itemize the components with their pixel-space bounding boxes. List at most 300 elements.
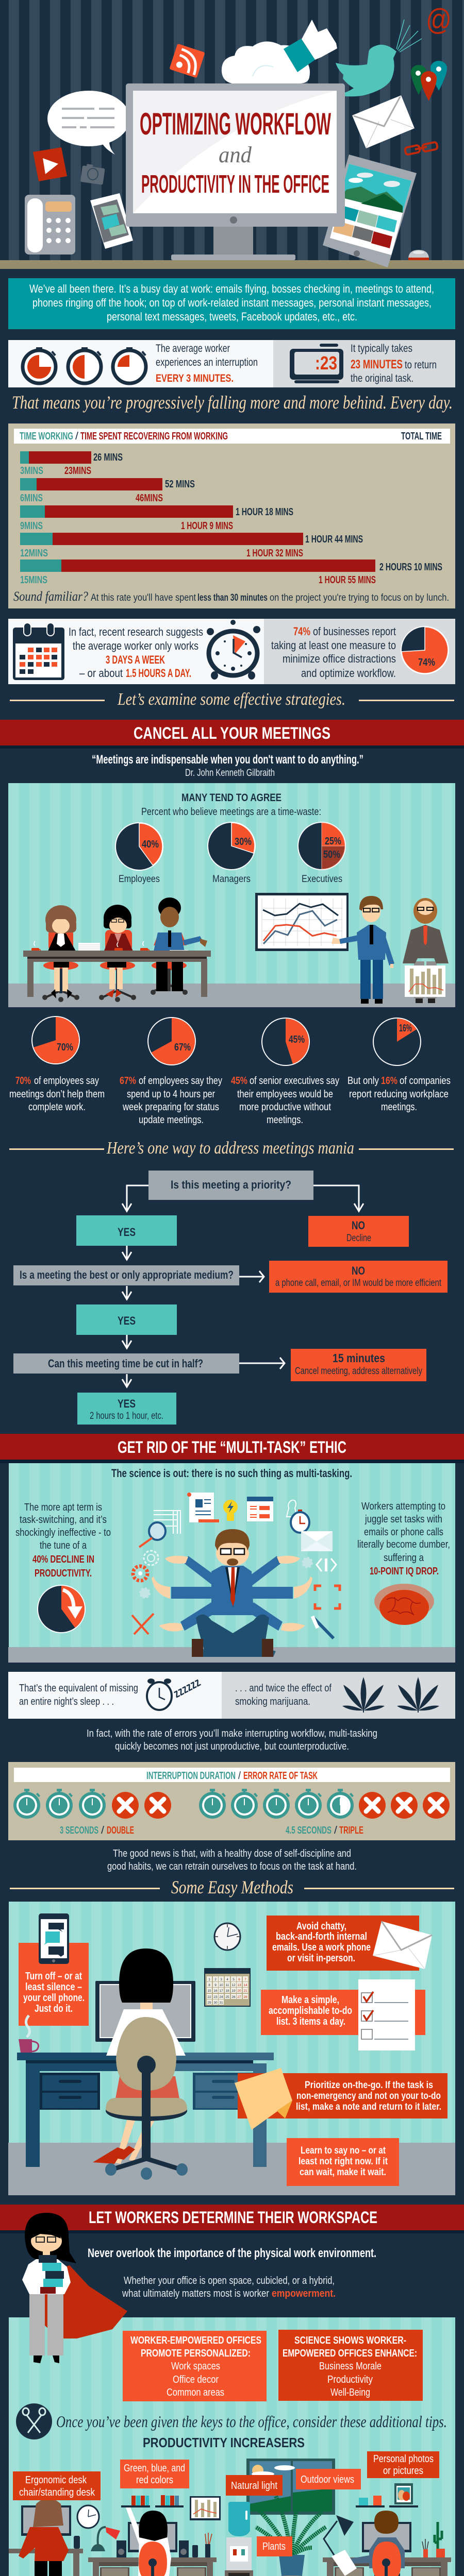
- window: [246, 2459, 335, 2515]
- chart header: /: [75, 431, 78, 442]
- wall calendar: 20: [237, 1989, 241, 1993]
- icon: stopwatch: [291, 1510, 309, 1533]
- icon: desk phone: [25, 195, 75, 255]
- stat: 70 percent: meetings don’t help them: [9, 1089, 105, 1100]
- wall calendar: 26: [231, 1995, 236, 1999]
- right desk with man: [323, 2511, 451, 2576]
- tip card: to-do list: list. 3 items a day.: [276, 2016, 345, 2027]
- stat: 70 percent: complete work.: [28, 1101, 86, 1113]
- icon: light bulb: [223, 1500, 238, 1521]
- text: 3 days a week: – or about: [79, 667, 123, 680]
- label: outdoor views: Outdoor views: [301, 2474, 354, 2485]
- text: every 3 minutes: The average worker: [156, 343, 230, 354]
- wall calendar: 1: [208, 1978, 210, 1981]
- center desk with woman: [88, 2506, 217, 2576]
- text: marijuana: smoking marijuana.: [235, 1696, 310, 1707]
- wall calendar: 25: [225, 1995, 229, 1999]
- stat: 45 percent: their employees would be: [237, 1089, 333, 1100]
- bar row: 1 hour 44 mins: 1 HOUR 44 MINS: [305, 534, 363, 545]
- text: 23 minutes: It typically takes: [351, 343, 412, 354]
- text: sound familiar: At this rate you'll have spent: [91, 592, 196, 603]
- section banner: cancel all your meetings: CANCEL ALL YOUR MEETINGS: [134, 724, 330, 742]
- wall calendar: 30: [213, 2001, 218, 2005]
- wall calendar: 3: [220, 1978, 222, 1981]
- framed chart: [190, 2496, 221, 2520]
- header: INTERRUPTION DURATION: [146, 1770, 236, 1782]
- yes box 2: [76, 1304, 177, 1335]
- icon: envelope: [352, 95, 415, 148]
- text: physical work environment: Whether your office is open space, cubicled, or a hybrid,: [124, 2275, 335, 2286]
- wall calendar: 21: [243, 1989, 247, 1993]
- wall calendar: 16: [213, 1989, 218, 1993]
- wall calendar: [204, 1968, 251, 2007]
- wall calendar: 27: [237, 1995, 241, 1999]
- text: physical work environment: what ultimately matters most is worker: [122, 2288, 269, 2299]
- text: 23 minutes: the original task.: [351, 372, 413, 384]
- pie chart: managers: [208, 822, 255, 885]
- icon: map pins: [411, 61, 447, 101]
- right lamp: [324, 2515, 354, 2565]
- panel: intro text: [8, 278, 455, 329]
- icon: sleeping clock: zzzzzz: [171, 1675, 203, 1701]
- no box: more efficient: [269, 1261, 448, 1293]
- question: medium: [13, 1265, 239, 1285]
- tip card: learn to say no: Learn to say no – or at: [301, 2145, 386, 2156]
- no box: decline: Decline: [346, 1233, 371, 1244]
- wall clock: [214, 1923, 240, 1950]
- wall calendar: 31: [219, 2001, 223, 2005]
- wall calendar: 14: [243, 1984, 247, 1987]
- bar row: 52 mins: [20, 478, 195, 504]
- bar row: 2 hours 10 mins: 15MINS: [20, 574, 47, 586]
- text: missing sleep: [19, 1683, 138, 1707]
- icon group: 4.5 seconds triple: [199, 1789, 450, 1819]
- panel: interruption stats: [8, 340, 455, 387]
- label: 4.5 seconds: 4.5 SECONDS: [286, 1825, 332, 1836]
- icon: calendar: [13, 623, 64, 680]
- pie chart: 74 percent: 74%: [418, 657, 435, 668]
- bar row: 52 mins: 46MINS: [136, 493, 163, 504]
- wall calendar: 5: [233, 1978, 235, 1981]
- bar row: 52 mins: 52 MINS: [165, 479, 195, 490]
- stat: 16 percent: But only: [347, 1075, 379, 1087]
- question: priority: Is this meeting a priority?: [171, 1178, 291, 1191]
- wall calendar: 29: [207, 2001, 211, 2005]
- text: 3 days a week: [69, 625, 203, 680]
- left woman at standing desk: [9, 2498, 83, 2576]
- label: personal photos: [367, 2451, 439, 2478]
- tip card: avoid chatty email: Avoid chatty,: [296, 1921, 346, 1932]
- stat: 45 percent: of senior executives say: [250, 1075, 339, 1087]
- tip card: learn to say no: least not right now. If it: [299, 2156, 388, 2167]
- card: worker-empowered offices: [123, 2331, 267, 2401]
- text: sound familiar: [13, 589, 449, 604]
- text: 3 days a week: the average worker only works: [73, 639, 198, 652]
- wall calendar: 22: [207, 1995, 211, 1999]
- text: IQ drop: Workers attempting to: [361, 1501, 445, 1512]
- pie chart row with statistics: [9, 1016, 451, 1126]
- panel: workspace and productivity increasers: [9, 2317, 455, 2576]
- label: ergonomic desk: Ergonomic desk: [25, 2475, 87, 2486]
- pie chart: employees: 40%: [142, 839, 159, 850]
- stat: 16 percent: 16%: [399, 1023, 412, 1034]
- framed photo: [394, 2483, 413, 2504]
- yes box 3: YES: [118, 1397, 136, 1410]
- panel: easy methods office scene: [8, 1902, 455, 2195]
- question: medium: Is a meeting the best or only appropriate medium?: [20, 1268, 234, 1281]
- label: outdoor views: [296, 2469, 361, 2489]
- bar row: 1 hour 44 mins: [20, 533, 363, 559]
- wall calendar: 10: [219, 1984, 223, 1987]
- yes box 3: [77, 1393, 176, 1425]
- stat: 67 percent: of employees say they: [139, 1075, 222, 1087]
- text: counterproductive: [87, 1728, 377, 1752]
- panel: research stats: [8, 619, 455, 684]
- bar row: 26 mins: 3MINS: [20, 465, 43, 477]
- flowchart arrows: [122, 1185, 363, 1387]
- tip card: learn to say no: [287, 2138, 399, 2186]
- subheading: Percent who believe meetings are a time-waste:: [141, 806, 321, 818]
- wall calendar: 17: [219, 1989, 223, 1993]
- icon: building chart: [154, 1511, 180, 1534]
- text: task switching: The more apt term is: [24, 1502, 102, 1513]
- water cooler: [225, 2502, 253, 2576]
- wall calendar: 8: [208, 1984, 210, 1987]
- label: personal photos: or pictures: [383, 2465, 423, 2477]
- wall calendar: 18: [225, 1989, 229, 1993]
- woman with cape and binders: [22, 2213, 127, 2363]
- bar row: 1 hour 18 mins: 1 HOUR 9 MINS: [181, 520, 233, 532]
- quote: Dr. John Kenneth Gilbraith: [185, 768, 275, 778]
- section banner: multi-task ethic: [0, 1434, 464, 1463]
- label: natural light: [226, 2475, 283, 2496]
- text: counterproductive: In fact, with the rate of errors you’ll make interrupting workflow, multi-tasking: [87, 1728, 377, 1739]
- text: missing sleep: That’s the equivalent of missing: [19, 1683, 138, 1694]
- bar row: 52 mins: 6MINS: [20, 493, 43, 504]
- pie chart: managers: 30%: [235, 836, 252, 848]
- stat: 45 percent: more productive without: [239, 1101, 331, 1113]
- text: IQ drop: juggle set tasks with: [364, 1514, 442, 1525]
- yes box 3: 2 hours to 1 hour, etc.: [90, 1411, 163, 1421]
- script heading: meetings mania: [9, 1139, 454, 1158]
- text: 74 percent of businesses: of businesses report: [313, 625, 396, 638]
- title: and: [219, 142, 252, 167]
- wall calendar: 15: [207, 1989, 211, 1993]
- icon: smartphone: [90, 193, 133, 249]
- text: task switching: 40% DECLINE IN: [32, 1554, 94, 1565]
- bar row: 26 mins: 26 MINS: [93, 452, 123, 463]
- label: ergonomic desk: [13, 2471, 101, 2500]
- icon: desk bell: [408, 250, 429, 260]
- text: good news: [107, 1848, 357, 1872]
- stat: 45 percent: 45%: [231, 1075, 247, 1087]
- monitor: [126, 83, 345, 260]
- person: man in blue suit: [151, 897, 207, 995]
- chart header: [14, 429, 450, 444]
- text: 3 days a week: 1.5 HOURS A DAY.: [126, 667, 191, 680]
- icon: tablet: [323, 155, 417, 267]
- stat: 16 percent: [347, 1018, 451, 1113]
- label: plants: Plants: [262, 2541, 286, 2552]
- question: priority: [148, 1171, 313, 1200]
- text: 74 percent of businesses: [271, 625, 396, 680]
- stat: 45 percent: meetings.: [267, 1114, 303, 1126]
- icon: leaves: [341, 1677, 440, 1713]
- potted plant on table: [256, 2496, 326, 2576]
- wall calendar: 12: [231, 1984, 236, 1987]
- yes box 1: YES: [118, 1226, 136, 1239]
- icon: mail: [301, 1531, 333, 1551]
- panel: many tend to agree with meeting room: [8, 783, 455, 1007]
- person: bearded man holding report: [403, 898, 449, 1003]
- text: 74 percent of businesses: taking at least one measure to: [271, 639, 396, 652]
- panel: time bar chart: [8, 423, 455, 608]
- text: sound familiar: less than 30 minutes: [197, 592, 268, 603]
- panel: interruption duration and error rate: [8, 1762, 455, 1840]
- script heading: meetings mania: Here’s one way to address meetings mania: [106, 1139, 354, 1158]
- person: woman with brown hair: [42, 905, 79, 1002]
- stat: 16 percent: meetings.: [381, 1101, 417, 1113]
- text: 3 days a week: 3 DAYS A WEEK: [106, 653, 165, 666]
- tip card: avoid chatty email: or visit in-person.: [287, 1953, 355, 1964]
- text: task switching: [15, 1502, 111, 1579]
- icon: stopwatches: [23, 347, 146, 383]
- wall calendar: 13: [237, 1984, 241, 1987]
- tip card: avoid chatty email: [267, 1916, 432, 1971]
- quote: [92, 753, 363, 778]
- label: 4.5 seconds: /: [334, 1825, 337, 1836]
- tip card: prioritize on the go: Prioritize on-the-go. If the task is: [305, 2080, 433, 2091]
- box: 15 minutes: 15 minutes: [333, 1351, 385, 1365]
- header: /: [238, 1770, 241, 1782]
- text: marijuana: . . . and twice the effect of: [235, 1683, 332, 1694]
- icon: wrench: [313, 1618, 334, 1638]
- tip card: silence cell phone: least silence –: [25, 1981, 82, 1993]
- stat: 67 percent: week preparing for status: [122, 1101, 219, 1113]
- icon: twitter bird: [335, 20, 422, 96]
- script heading: some easy methods: [10, 1877, 454, 1897]
- coffee cups and paper stacks: [31, 941, 188, 955]
- text: sound familiar: Sound familiar?: [13, 589, 88, 604]
- pie chart: executives: 50%: [323, 849, 340, 860]
- woman from behind: [93, 1948, 188, 2180]
- wall calendar: 7: [244, 1978, 246, 1981]
- icon: chess pawn: [287, 1500, 297, 1517]
- checklist: [358, 1979, 415, 2050]
- bar row: 1 hour 44 mins: 1 HOUR 32 MINS: [246, 548, 303, 559]
- pie chart: 74 percent: [401, 626, 449, 674]
- text: IQ drop: suffering a: [384, 1552, 424, 1564]
- text: every 3 minutes: experiences an interruption: [156, 357, 258, 368]
- tip card: to-do list: [261, 1979, 425, 2050]
- text: task switching: task-switching, and it’s: [20, 1514, 107, 1526]
- card: science shows: Well-Being: [330, 2387, 370, 2398]
- icon: digital clock: :23: [315, 352, 337, 374]
- text: good news: good habits, we can retrain ourselves to focus on the task at hand.: [107, 1861, 357, 1872]
- label: 3 seconds: /: [101, 1825, 104, 1836]
- section banner: multi-task ethic: GET RID OF THE “MULTI-TASK” ETHIC: [118, 1438, 346, 1456]
- icon group: 3 seconds double: [13, 1789, 171, 1819]
- icon: alarm clock: [207, 620, 260, 680]
- stat: 70 percent: of employees say: [34, 1075, 99, 1087]
- desk: [17, 2053, 274, 2167]
- pie chart: executives: [298, 822, 345, 885]
- icon: magnifier: [139, 1522, 165, 1547]
- heading: The science is out: there is no such thing as multi-tasking.: [111, 1467, 352, 1480]
- tip card: avoid chatty email: back-and-forth internal: [276, 1931, 367, 1942]
- chart header: TIME WORKING: [20, 431, 73, 442]
- text: IQ drop: 10-POINT IQ DROP.: [370, 1566, 439, 1577]
- text: physical work environment: [88, 2246, 376, 2299]
- section banner: cancel all your meetings: [0, 720, 464, 749]
- multitasking man: [152, 1529, 312, 1657]
- heading: MANY TEND TO AGREE: [181, 792, 281, 804]
- pie chart: employees: [115, 823, 163, 885]
- bar row: 26 mins: 23MINS: [64, 465, 91, 477]
- stat: 67 percent: 67%: [174, 1042, 191, 1053]
- stat: 45 percent: 45%: [289, 1034, 305, 1045]
- card: worker-empowered offices: Common areas: [167, 2387, 224, 2398]
- label: personal photos: Personal photos: [373, 2453, 434, 2465]
- label: colors: Green, blue, and: [124, 2463, 185, 2474]
- icon: at sign: @: [426, 3, 452, 37]
- text: task switching: PRODUCTIVITY.: [35, 1568, 92, 1579]
- wall calendar: 6: [238, 1978, 240, 1981]
- icon: focus corners: [315, 1586, 340, 1608]
- icon: info code brackets: [317, 1558, 336, 1571]
- text: 23 minutes: to return: [405, 359, 437, 371]
- no box: decline: [308, 1216, 409, 1247]
- bar row: 1 hour 18 mins: [20, 505, 293, 532]
- stat: 70 percent: 70%: [57, 1042, 73, 1053]
- icon: crossed keys: [16, 2403, 52, 2439]
- card: science shows: Productivity: [327, 2374, 373, 2385]
- label: natural light: Natural light: [231, 2480, 277, 2492]
- label: 4.5 seconds: TRIPLE: [339, 1825, 363, 1836]
- card: science shows: [278, 2330, 423, 2401]
- wall calendar: 11: [226, 1984, 229, 1987]
- icon: video play: [33, 147, 67, 181]
- section banner: let workers determine their workspace: [0, 2205, 464, 2233]
- panel: intro text: personal text messages, tweets, Facebook updates, etc., etc.: [107, 310, 357, 323]
- tip card: silence cell phone: Just do it.: [35, 2003, 73, 2014]
- icon: browser window: [247, 1497, 273, 1521]
- text: every 3 minutes: EVERY 3 MINUTES.: [156, 372, 234, 384]
- person: presenter in blue suit: [332, 896, 394, 1004]
- text: IQ drop: emails or phone calls: [364, 1527, 443, 1538]
- icon: scroll document: [187, 1493, 219, 1522]
- script heading: some easy methods: Some Easy Methods: [171, 1877, 293, 1897]
- bar row: 2 hours 10 mins: [20, 560, 442, 586]
- stat: 70 percent: [9, 1016, 105, 1113]
- icon: coffee mug: [19, 2015, 38, 2053]
- text: task switching: the tune of a: [40, 1540, 87, 1551]
- question: cut in half: [13, 1353, 239, 1374]
- stat: 67 percent: update meetings.: [139, 1114, 204, 1126]
- hero illustration: office desk with devices and social icons: [0, 0, 464, 269]
- tip card: silence cell phone: your cell phone.: [23, 1992, 85, 2004]
- title: [140, 107, 331, 198]
- yes box 1: [76, 1215, 177, 1246]
- text: marijuana: [235, 1683, 332, 1707]
- icon: sleeping clock: [147, 1675, 203, 1710]
- card: worker-empowered offices: Office decor: [173, 2374, 219, 2385]
- wall calendar: 9: [214, 1984, 217, 1987]
- card: worker-empowered offices: WORKER-EMPOWERED OFFICES: [130, 2335, 261, 2346]
- panel: multitasking man: [8, 1463, 455, 1663]
- text: 74 percent of businesses: and optimize workflow.: [301, 667, 396, 680]
- pie chart: executives: 25%: [325, 836, 341, 847]
- pie chart: managers: Managers: [212, 874, 251, 885]
- text: 74 percent of businesses: 74%: [293, 625, 310, 638]
- script heading: strategies: Let’s examine some effective strategies.: [117, 690, 345, 709]
- whiteboard line chart: [255, 893, 349, 951]
- icon: pencil and pen: [132, 1614, 154, 1634]
- person: woman with glasses: [99, 905, 136, 1002]
- text: task switching: shockingly ineffective - to: [15, 1527, 111, 1538]
- bar row: 2 hours 10 mins: 1 HOUR 55 MINS: [319, 574, 376, 586]
- shelves with binders: [121, 2495, 418, 2507]
- wall clock: [77, 2505, 99, 2528]
- tip card: to-do list: Make a simple,: [281, 1994, 339, 2006]
- label: colors: red colors: [136, 2475, 173, 2486]
- wall calendar: 24: [219, 1995, 223, 1999]
- no box: decline: NO: [352, 1219, 365, 1232]
- icon: RSS: [169, 44, 205, 78]
- label: colors: [120, 2460, 189, 2488]
- panel: sleep and marijuana equivalents: [8, 1672, 455, 1719]
- flowchart: [13, 1171, 448, 1425]
- chart header: TOTAL TIME: [401, 431, 442, 442]
- meeting table with three seated people: [23, 897, 211, 1002]
- label: 3 seconds: DOUBLE: [107, 1825, 134, 1836]
- header: ERROR RATE OF TASK: [243, 1770, 318, 1782]
- wall calendar: 19: [231, 1989, 236, 1993]
- bar row: 1 hour 18 mins: 9MINS: [20, 520, 43, 532]
- text: every 3 minutes: [156, 343, 258, 384]
- heading: productivity increasers: PRODUCTIVITY INCREASERS: [143, 2435, 305, 2450]
- card: science shows: SCIENCE SHOWS WORKER-: [294, 2335, 406, 2346]
- icon: cloud with thumbs up: [222, 20, 337, 83]
- card: science shows: EMPOWERED OFFICES ENHANCE:: [283, 2348, 417, 2359]
- stat: 16 percent: 16%: [381, 1075, 397, 1087]
- tip card: to-do list: accomplishable to-do: [269, 2005, 352, 2016]
- text: 23 minutes: 23 MINUTES: [351, 358, 403, 371]
- table: [23, 951, 211, 997]
- task icons around the man: [132, 1493, 340, 1638]
- header: [14, 1768, 450, 1782]
- chart header: TIME SPENT RECOVERING FROM WORKING: [80, 431, 228, 442]
- icon: camera: [80, 163, 105, 185]
- icon: speech bubble: [47, 91, 130, 155]
- bar row: 26 mins: [20, 451, 123, 477]
- desk with woman seated at monitor: [17, 1948, 274, 2180]
- card: worker-empowered offices: PROMOTE PERSONALIZED:: [141, 2348, 251, 2359]
- stat: 67 percent: [120, 1018, 222, 1126]
- tip card: silence cell phone: [19, 1913, 89, 2026]
- wall calendar: 28: [243, 1995, 247, 1999]
- tip card: avoid chatty email: emails. Use a work phone: [272, 1942, 371, 1953]
- text: counterproductive: quickly becomes not just unproductive, but counterproductive.: [115, 1741, 349, 1752]
- tip card: prioritize on the go: [235, 2068, 448, 2130]
- icon: gears: [133, 1551, 312, 1598]
- card: worker-empowered offices: Work spaces: [171, 2361, 220, 2372]
- no box: more efficient: NO: [352, 1264, 365, 1277]
- question: cut in half: Can this meeting time be cut in half?: [48, 1357, 203, 1370]
- text: 3 days a week: In fact, recent research suggests: [69, 625, 203, 638]
- yes box 2: YES: [118, 1314, 136, 1327]
- bar row: 1 hour 44 mins: 12MINS: [20, 548, 48, 559]
